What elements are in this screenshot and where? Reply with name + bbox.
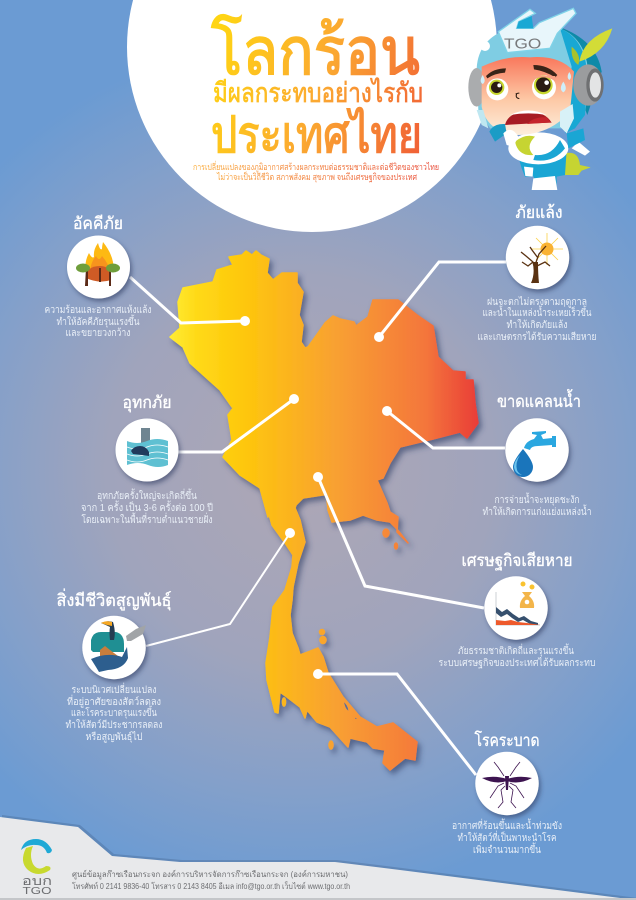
- description: drought: และเกษตรกรได้รับความเสียหาย: [478, 331, 596, 343]
- panel: wildfire: [44, 214, 152, 339]
- footer panel: [0, 815, 636, 900]
- connector: economy: [313, 472, 484, 608]
- description: species extinction: ระบบนิเวศเปลี่ยนแปลง: [72, 682, 157, 696]
- heading: species extinction: สิ่งมีชีวิตสูญพันธุ์: [56, 588, 172, 611]
- description: species extinction: หรือสูญพันธุ์ไป: [86, 731, 142, 743]
- title: มีผลกระทบอย่างไรกับ: [213, 78, 423, 108]
- icon: wildfire: [67, 236, 130, 298]
- panel: species extinction: [56, 588, 172, 743]
- connector: flood: [178, 394, 299, 452]
- heading: drought: ภัยแล้ง: [516, 203, 562, 222]
- footer contact text: โทรศัพท์ 0 2141 9836-40 โทรสาร 0 2143 8405 อีเมล info@tgo.or.th เว็บไซต์ www.tgo.or.th: [72, 881, 350, 891]
- description: wildfire: ทำให้อัคคีภัยรุนแรงขึ้น: [56, 314, 140, 328]
- description: wildfire: [44, 304, 152, 339]
- description: water shortage: [482, 492, 592, 518]
- title circle: [127, 0, 497, 232]
- icon: mosquito: [475, 752, 539, 815]
- icon: faucet and water drop: [505, 418, 569, 482]
- connector: drought: [374, 262, 506, 342]
- connector: species: [146, 528, 295, 646]
- description: epidemic: เพิ่มจำนวนมากขึ้น: [473, 842, 541, 856]
- icon: drought: [506, 226, 569, 289]
- description: flood: อุทกภัยครั้งใหญ่จะเกิดถี่ขึ้น: [97, 488, 197, 502]
- description: species extinction: ทำให้สัตว์มีประชากรลดลง: [66, 719, 163, 731]
- connector: water shortage: [382, 406, 505, 448]
- description: epidemic: ทำให้สัตว์ที่เป็นพาหะนำโรค: [458, 830, 556, 844]
- connector: epidemic: [313, 669, 476, 775]
- description: water shortage: ทำให้เกิดการแก่งแย่งแหล่งน้ำ: [482, 504, 592, 518]
- subtitle: [193, 160, 439, 183]
- icon: TGO logo: อบก: [22, 874, 52, 888]
- panel: drought: [478, 203, 596, 343]
- thailand map: [170, 251, 478, 770]
- icon: TGO logo: [21, 839, 52, 897]
- heading: economy: เศรษฐกิจเสียหาย: [462, 551, 572, 571]
- title: โลกร้อน: [211, 14, 420, 88]
- panel: water shortage: [482, 389, 592, 518]
- connector: wildfire: [130, 277, 250, 326]
- icon: TGO mascot: TGO: [504, 37, 541, 53]
- description: drought: [478, 296, 596, 343]
- icon: TGO mascot: [468, 8, 612, 190]
- title: [211, 14, 423, 163]
- description: drought: ฝนจะตกไม่ตรงตามฤดูกาล: [487, 296, 587, 308]
- description: species extinction: [66, 682, 163, 743]
- description: drought: และน้ำในแหล่งน้ำระเหยเร็วขึ้น: [482, 305, 592, 319]
- subtitle: การเปลี่ยนแปลงของภูมิอากาศสร้างผลกระทบต่อธรรมชาติและต่อชีวิตของชาวไทย: [193, 160, 439, 173]
- description: drought: ทำให้เกิดภัยแล้ง: [506, 319, 568, 331]
- description: epidemic: [452, 818, 562, 856]
- icon: TGO logo: TGO: [22, 886, 52, 897]
- description: wildfire: และขยายวงกว้าง: [66, 327, 131, 339]
- description: economy: ภัยธรรมชาติเกิดถี่และรุนแรงขึ้น: [458, 643, 574, 657]
- footer contact text: ศูนย์ข้อมูลก๊าซเรือนกระจก องค์การบริหารจัดการก๊าซเรือนกระจก (องค์การมหาชน): [72, 869, 348, 880]
- description: wildfire: ความร้อนและอากาศแห้งแล้ง: [44, 304, 152, 316]
- heading: water shortage: ขาดแคลนน้ำ: [497, 389, 581, 411]
- icon: flood: [116, 418, 178, 482]
- panel: epidemic: [452, 730, 562, 856]
- icon: endangered animals: [82, 616, 146, 679]
- description: species extinction: ที่อยู่อาศัยของสัตว์ลดลง: [67, 694, 161, 708]
- title: ประเทศไทย: [211, 107, 422, 163]
- description: flood: โดยเฉพาะในพื้นที่ราบต่ำแนวชายฝั่ง: [82, 512, 213, 526]
- description: economy: ระบบเศรษฐกิจของประเทศได้รับผลกระทบ: [438, 657, 596, 669]
- description: flood: จาก 1 ครั้ง เป็น 3-6 ครั้งต่อ 100 ปี: [81, 500, 213, 514]
- description: water shortage: การจ่ายน้ำจะหยุดชะงัก: [494, 492, 580, 506]
- heading: wildfire: อัคคีภัย: [73, 214, 123, 233]
- description: epidemic: อากาศที่ร้อนขึ้นและน้ำท่วมขัง: [452, 818, 562, 832]
- description: flood: [81, 488, 213, 526]
- icon: money bag and falling chart: [484, 576, 548, 640]
- subtitle: ไม่ว่าจะเป็นวิถีชีวิต สภาพสังคม สุขภาพ จนถึงเศรษฐกิจของประเทศ: [216, 170, 417, 183]
- panel: flood: [81, 393, 213, 526]
- description: species extinction: และโรคระบาดรุนแรงขึ้น: [71, 705, 157, 719]
- description: economy: [438, 643, 596, 669]
- footer contact text: [72, 869, 350, 891]
- panel: economy: [438, 551, 596, 669]
- heading: epidemic: โรคระบาด: [474, 730, 540, 750]
- heading: flood: อุทกภัย: [122, 393, 172, 413]
